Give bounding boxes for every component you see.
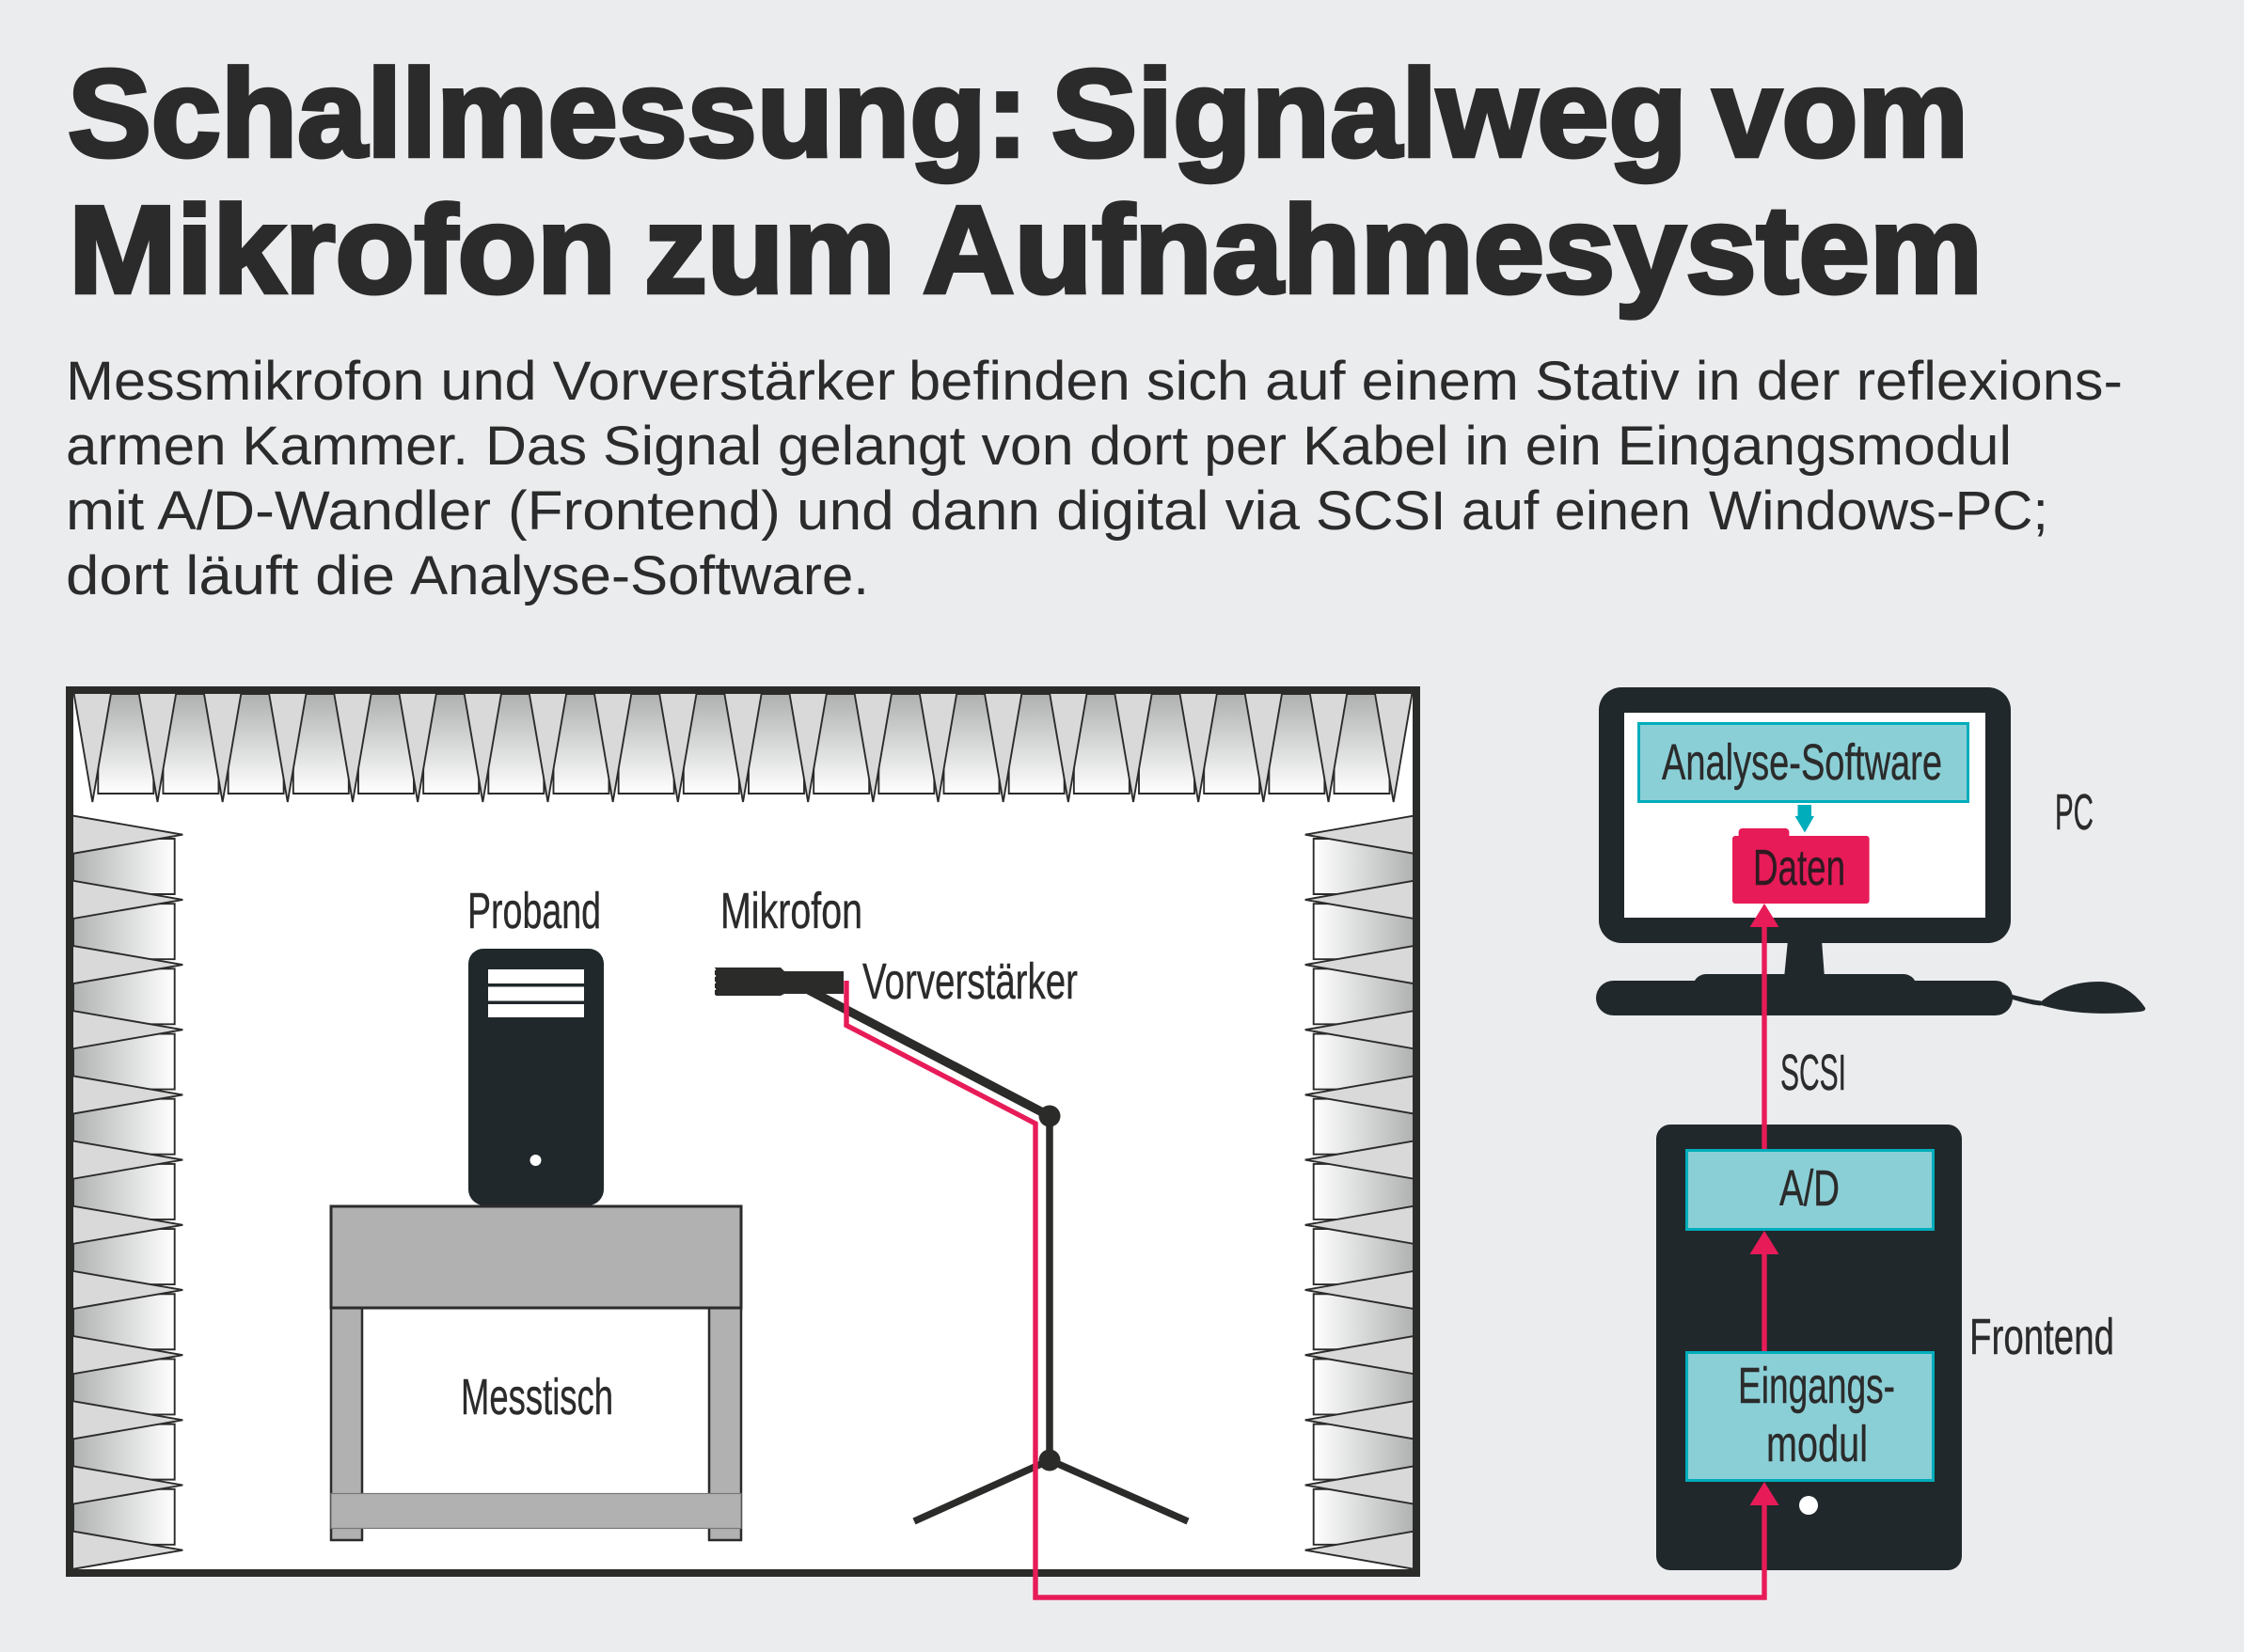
- box: Eingangsmodul: [1687, 1352, 1934, 1480]
- label: Frontend: Frontend: [1969, 1309, 2114, 1365]
- box: Eingangsmodul: Eingangs-: [1738, 1358, 1895, 1414]
- title: vom: [1713, 44, 1968, 182]
- mouse cable: [2011, 997, 2041, 1003]
- intro text: armen Kammer.: [66, 416, 468, 477]
- title: zum: [644, 181, 895, 319]
- ceiling absorber wedges: [73, 692, 1413, 802]
- left wall absorber wedges: [71, 815, 182, 1569]
- icon: subject computer tower: [468, 949, 604, 1205]
- label: Proband: Proband: [467, 883, 601, 939]
- intro text: befinden sich auf einem Stativ in der reflexions-: [909, 351, 2123, 412]
- mouse: [2038, 982, 2145, 1014]
- arrow: Eingangsmodul to A/D: [1749, 1231, 1779, 1351]
- intro text: [66, 351, 2123, 606]
- box: A/D: A/D: [1779, 1160, 1840, 1217]
- panel: frontend: [1656, 1125, 1962, 1570]
- label: SCSI: SCSI: [1780, 1045, 1846, 1101]
- intro text: Messmikrofon und Vorverstärker: [66, 351, 895, 412]
- box: Analyse-Software: Analyse-Software: [1662, 734, 1942, 791]
- arrow: signal cable from preamplifier to Eingangsmodul: [846, 981, 1779, 1597]
- label: PC: PC: [2055, 784, 2094, 841]
- keyboard: [1596, 981, 2013, 1015]
- intro text: Das Signal gelangt von dort per Kabel in ein Eingangsmodul: [485, 416, 2012, 477]
- tripod feet: [914, 1460, 1188, 1521]
- intro text: Analyse-Software.: [410, 545, 869, 606]
- monitor foot: [1693, 974, 1917, 1002]
- title: Aufnahmesystem: [923, 181, 1983, 319]
- intro text: mit A/D-Wandler: [66, 480, 491, 542]
- title: Signalweg: [1051, 44, 1687, 182]
- intro text: Windows-PC;: [1709, 480, 2048, 542]
- arrow: software to data: [1794, 805, 1814, 833]
- stand arm: [809, 990, 1050, 1116]
- icon: data folder: Daten: [1753, 840, 1845, 896]
- microphone and preamplifier: [715, 968, 844, 996]
- title: [68, 44, 1983, 319]
- box: A/D: [1687, 1151, 1934, 1230]
- icon: PC monitor: [1596, 687, 2145, 1015]
- icon: data folder: [1732, 828, 1870, 904]
- label: Messtisch: Messtisch: [461, 1369, 613, 1425]
- chamber interior: [70, 690, 1416, 1573]
- monitor screen: [1624, 713, 1985, 918]
- intro text: SCSI auf einen: [1316, 480, 1691, 542]
- right wall absorber wedges: [1305, 815, 1415, 1569]
- measuring table: [331, 1206, 741, 1540]
- monitor stand: [1784, 940, 1825, 978]
- arrow: SCSI to PC: [1749, 904, 1779, 1149]
- stand pole: [1046, 1116, 1053, 1460]
- box: Eingangsmodul: modul: [1766, 1416, 1868, 1472]
- intro text: dort läuft die: [66, 545, 395, 606]
- intro text: (Frontend) und dann digital via: [508, 480, 1301, 542]
- monitor frame: [1599, 687, 2011, 943]
- title: Mikrofon: [69, 181, 616, 319]
- label: Mikrofon: Mikrofon: [720, 883, 862, 939]
- panel: anechoic chamber: [70, 690, 1416, 1573]
- box: Analyse-Software: [1638, 724, 1967, 801]
- microphone stand: [809, 990, 1188, 1521]
- chamber wall: [70, 690, 1416, 1573]
- label: Vorverstärker: Vorverstärker: [862, 953, 1078, 1010]
- title: Schallmessung:: [68, 44, 1028, 182]
